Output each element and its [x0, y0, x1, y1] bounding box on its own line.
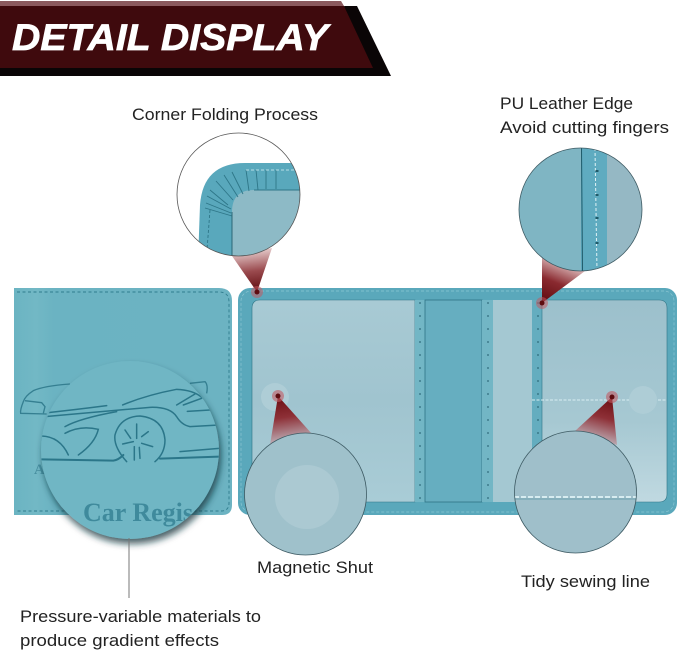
label: PU leather edge: Avoid cutting fingers — [500, 118, 669, 137]
left magnet disc — [261, 383, 289, 411]
label: magnetic shut: Magnetic Shut — [257, 558, 373, 577]
title: DETAIL DISPLAY — [12, 17, 332, 58]
label: pressure-variable materials: Pressure-variable materials to — [20, 607, 261, 626]
stitching across right pocket — [532, 399, 667, 401]
label: pressure-variable materials — [20, 607, 261, 650]
magnifier: magnetic shut — [244, 433, 366, 555]
embossed letter on cover: A — [34, 462, 45, 478]
callout pointer: corner — [232, 248, 272, 298]
right clear pocket — [542, 300, 667, 502]
narrow clear pocket — [493, 300, 532, 502]
right spine strip — [482, 300, 493, 502]
label: corner folding: Corner Folding Process — [132, 105, 318, 124]
banner black shadow — [0, 6, 391, 76]
magnifier: tidy sewing — [514, 431, 637, 553]
left spine strip — [415, 300, 425, 502]
right magnet disc — [629, 386, 657, 414]
magnifier: PU leather edge — [519, 148, 643, 272]
embossed Car Regis text: Car Regis — [83, 498, 193, 527]
callout pointer: magnet — [270, 390, 312, 445]
closed wallet front cover — [14, 288, 232, 515]
outer leather frame — [238, 288, 677, 515]
embossed car outline on cover — [21, 382, 207, 414]
open wallet interior — [238, 288, 677, 515]
divider strip — [532, 300, 542, 502]
banner top highlight — [0, 1, 344, 6]
magnifier: corner folding — [176, 132, 300, 256]
embossed car lines — [42, 389, 220, 462]
label: PU leather edge: PU Leather Edge — [500, 94, 633, 113]
callout pointer: sewing — [575, 391, 618, 445]
centre spine panel — [425, 300, 482, 502]
left clear pocket — [252, 300, 415, 502]
label: tidy sewing: Tidy sewing line — [521, 572, 650, 591]
label: pressure-variable materials: produce gradient effects — [20, 631, 219, 650]
label: PU leather edge — [500, 94, 669, 137]
banner maroon plate — [0, 6, 373, 68]
callout pointer: PU edge — [536, 258, 585, 309]
leader line to gradient caption — [128, 538, 130, 598]
header banner — [0, 1, 391, 76]
magnifier: car emboss — [41, 361, 220, 539]
